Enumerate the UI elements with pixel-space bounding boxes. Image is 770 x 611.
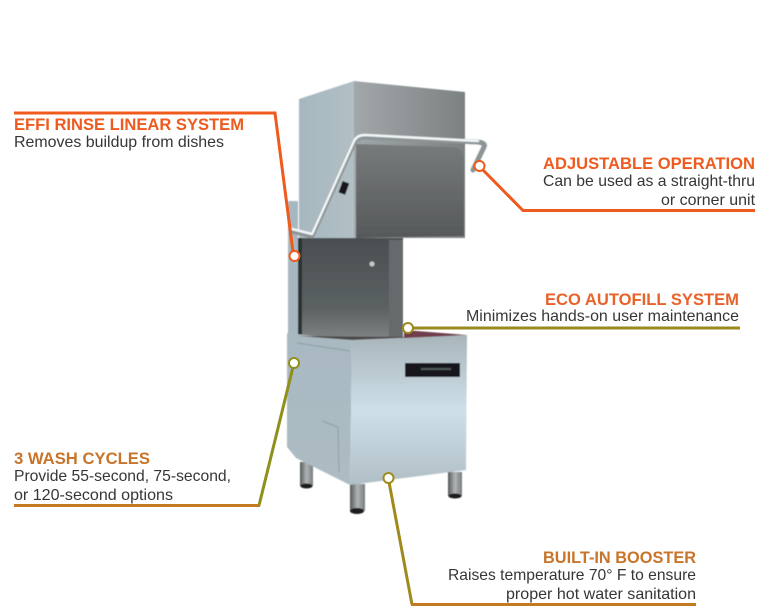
callout: 3 wash cycles: or 120-second options: [14, 487, 173, 504]
legs: [300, 462, 462, 514]
hood: [299, 81, 465, 238]
callout: built-in booster: [384, 473, 696, 604]
callout: 3 wash cycles: [14, 358, 299, 506]
callout: effi rinse linear system: EFFI RINSE LINEAR SYSTEM: [14, 115, 244, 134]
callout: 3 wash cycles: 3 WASH CYCLES: [14, 449, 150, 468]
callout: built-in booster: BUILT-IN BOOSTER: [543, 548, 696, 567]
wash cavity: [298, 238, 403, 338]
callout: 3 wash cycles: Provide 55-second, 75-second,: [14, 468, 231, 485]
callout: eco autofill system: Minimizes hands-on user maintenance: [466, 308, 739, 325]
callout: eco autofill system: [403, 290, 740, 333]
callout: built-in booster: proper hot water sanitation: [506, 586, 696, 603]
dishwasher machine: [287, 81, 484, 514]
door handle: [292, 135, 484, 236]
callout: built-in booster: Raises temperature 70° F to ensure: [448, 567, 696, 584]
left column: [288, 201, 298, 340]
callout: adjustable operation: [474, 154, 756, 210]
base cabinet: [287, 330, 467, 485]
callout: adjustable operation: Can be used as a straight-thru: [543, 173, 755, 190]
callout: adjustable operation: or corner unit: [661, 192, 756, 209]
callout: effi rinse linear system: Removes buildup from dishes: [14, 134, 224, 151]
callout: adjustable operation: ADJUSTABLE OPERATION: [543, 154, 755, 173]
callout: eco autofill system: ECO AUTOFILL SYSTEM: [545, 290, 739, 309]
callout: effi rinse linear system: [14, 113, 300, 261]
